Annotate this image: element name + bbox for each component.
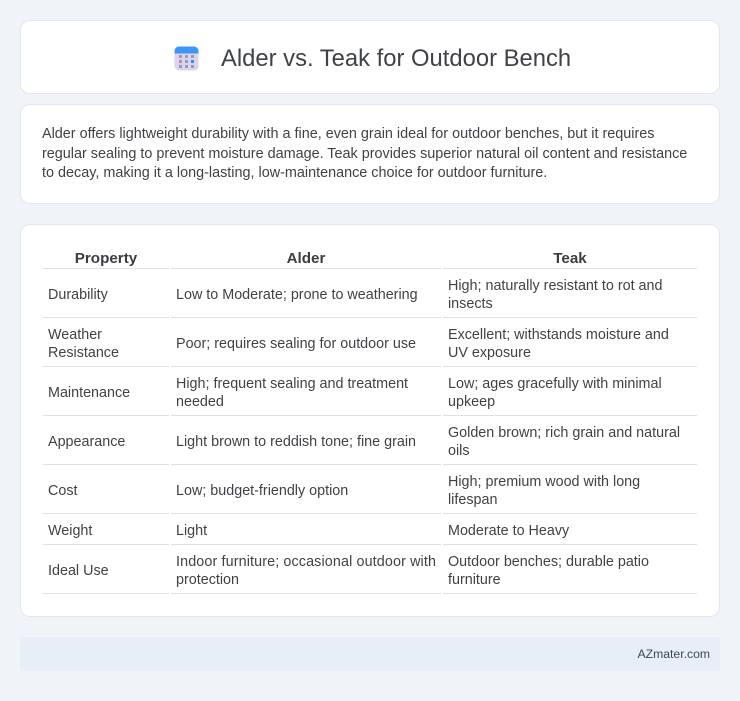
comparison table: Light brown to reddish tone; fine grain: [176, 434, 416, 450]
comparison table: Durability: [48, 287, 108, 303]
comparison table: Appearance: [48, 434, 125, 450]
comparison table: Alder: [287, 250, 325, 267]
comparison table: Low to Moderate; prone to weathering: [176, 287, 418, 303]
comparison table: insects: [448, 296, 493, 312]
comparison table: Low; budget-friendly option: [176, 483, 348, 499]
footer credit: AZmater.com: [638, 647, 710, 661]
comparison table: High; naturally resistant to rot and: [448, 278, 662, 294]
comparison table: needed: [176, 394, 224, 410]
comparison table: Poor; requires sealing for outdoor use: [176, 336, 416, 352]
title panel: [20, 20, 720, 94]
comparison table: UV exposure: [448, 345, 531, 361]
comparison table: Moderate to Heavy: [448, 523, 569, 539]
comparison table: Cost: [48, 483, 78, 499]
summary panel: [20, 104, 720, 204]
comparison table: Golden brown; rich grain and natural: [448, 425, 680, 441]
comparison table: lifespan: [448, 492, 497, 508]
comparison table: Indoor furniture; occasional outdoor with: [176, 554, 436, 570]
summary text: [42, 126, 687, 181]
summary text: regular sealing to prevent moisture damage. Teak provides superior natural oil content and resistance: [42, 146, 687, 162]
comparison table: Property: [75, 250, 137, 267]
comparison table: Weight: [48, 523, 92, 539]
comparison table: High; frequent sealing and treatment: [176, 376, 408, 392]
summary text: to decay, making it a long-lasting, low-maintenance choice for outdoor furniture.: [42, 165, 547, 181]
comparison table: oils: [448, 443, 470, 459]
summary text: Alder offers lightweight durability with a fine, even grain ideal for outdoor benches, but it requires: [42, 126, 654, 142]
comparison table: Ideal Use: [48, 563, 109, 579]
icon: calendar: [174, 46, 198, 70]
comparison table: Maintenance: [48, 385, 130, 401]
comparison table: Resistance: [48, 345, 119, 361]
comparison table: Excellent; withstands moisture and: [448, 327, 669, 343]
comparison table: Low; ages gracefully with minimal: [448, 376, 662, 392]
title: Alder vs. Teak for Outdoor Bench: [221, 45, 571, 72]
comparison table: Weather: [48, 327, 102, 343]
comparison table: High; premium wood with long: [448, 474, 640, 490]
comparison table: furniture: [448, 572, 501, 588]
comparison table: Outdoor benches; durable patio: [448, 554, 649, 570]
comparison table panel: [20, 224, 720, 617]
comparison table: Light: [176, 523, 207, 539]
comparison table: Teak: [553, 250, 587, 267]
comparison table: upkeep: [448, 394, 495, 410]
comparison table: protection: [176, 572, 239, 588]
footer bar: [20, 637, 720, 671]
